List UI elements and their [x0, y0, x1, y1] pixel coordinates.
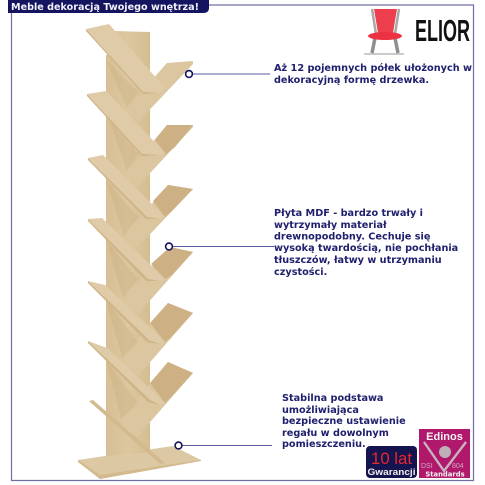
- logo: Elior: [364, 9, 470, 54]
- callout 1: shelves: [186, 62, 472, 86]
- badge: Edinos standards: Edinos: [426, 431, 463, 443]
- badge: 10 lat warranty: Gwarancji: [368, 467, 416, 477]
- callout 1: shelves: Aż 12 pojemnych półek ułożonych w: [274, 62, 472, 74]
- shadows on column: [106, 60, 138, 419]
- callout 3: base: umożliwiająca: [282, 405, 359, 416]
- icon: red chair: [364, 9, 404, 54]
- callout 2: MDF: czystości.: [274, 266, 327, 278]
- callout 1: shelves: dekoracyjną formę drzewka.: [274, 75, 429, 86]
- header banner: Meble dekoracją Twojego wnętrza!: [11, 2, 199, 13]
- badge: 10 lat warranty: 10 lat: [371, 449, 412, 468]
- bookshelf illustration: [78, 24, 201, 479]
- callout 2: MDF: Płyta MDF - bardzo trwały i: [274, 208, 423, 219]
- callout 2: MDF: wytrzymały materiał: [274, 220, 387, 231]
- left shelves: [86, 24, 165, 464]
- callout 2: MDF: [166, 208, 458, 278]
- central column: [106, 31, 150, 456]
- callout 2: MDF: tłuszczów, łatwy w utrzymaniu: [274, 254, 442, 266]
- badge: Edinos standards: DSI: [421, 463, 433, 470]
- right shelves: [121, 61, 193, 437]
- badge: Edinos standards: 804: [452, 463, 464, 470]
- badge: Edinos standards: Standards: [425, 470, 465, 478]
- badge: 10 lat warranty: [366, 446, 417, 478]
- callout 3: base: pomieszczeniu.: [282, 439, 366, 450]
- callout 3: base: Stabilna podstawa: [282, 393, 383, 404]
- callout 3: base: bezpieczne ustawienie: [282, 416, 406, 427]
- badge: Edinos standards: [419, 429, 470, 478]
- callout 2: MDF: drewnopodobny. Cechuje się: [274, 232, 431, 242]
- callout 3: base: [175, 393, 406, 450]
- callout 3: base: regału w dowolnym: [282, 428, 389, 439]
- base: [78, 446, 201, 479]
- callout 2: MDF: wysoką twardością, nie pochłania: [274, 242, 458, 254]
